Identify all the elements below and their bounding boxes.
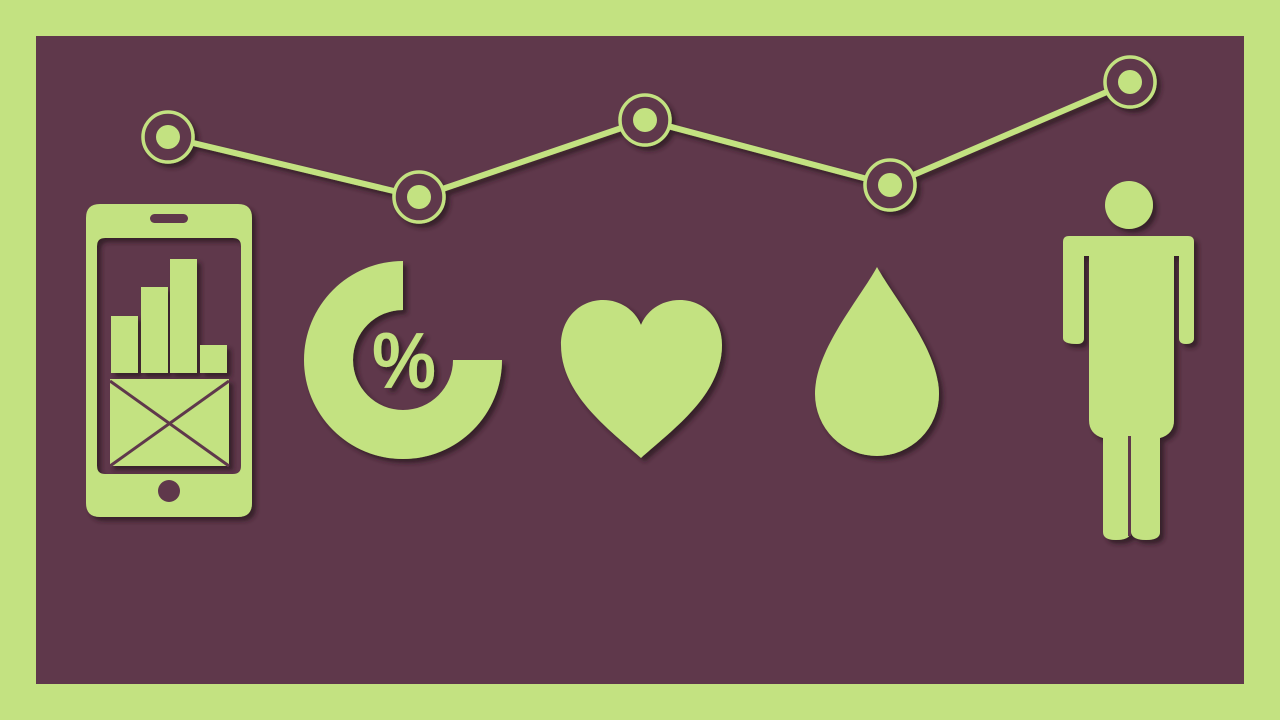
icon: percent donut (304, 261, 502, 459)
icon: heart (561, 300, 722, 458)
icon: person (1063, 181, 1194, 540)
icon: water drop (815, 267, 939, 456)
icon: percent donut: % (372, 316, 436, 405)
icon: phone (86, 204, 252, 517)
line chart (143, 57, 1155, 222)
